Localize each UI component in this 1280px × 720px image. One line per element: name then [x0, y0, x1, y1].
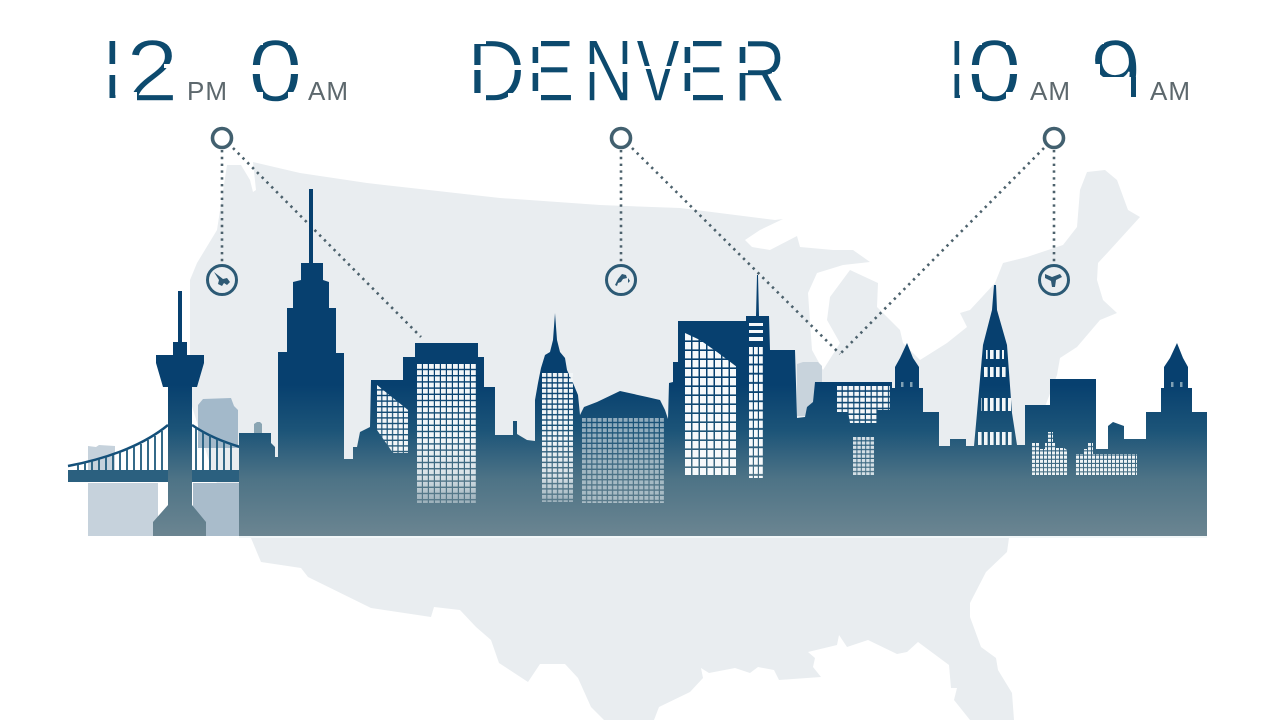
windows: right midrise	[837, 386, 890, 475]
city name: DENVER: E	[678, 21, 727, 120]
digits: 10: 0	[967, 21, 1022, 120]
tower: observation tower	[153, 291, 206, 536]
windows: small turret slits	[901, 382, 1182, 387]
windows: spire building	[542, 373, 573, 502]
marker: mountain ring	[612, 128, 630, 148]
icon: west clock badge	[208, 266, 236, 294]
windows: spire tower bands	[978, 350, 1014, 445]
dotted connector: mountain	[621, 148, 840, 354]
city name: DENVER	[467, 21, 786, 120]
skyline silhouette	[239, 189, 1207, 536]
background buildings: pale blue	[88, 362, 822, 536]
windows: building A side wing	[377, 385, 408, 453]
windows: domed building	[582, 418, 664, 503]
digits: 10	[925, 21, 1023, 120]
city name: DENVER: D	[467, 21, 526, 120]
digits: 12: 1	[86, 21, 135, 120]
windows: building A	[417, 364, 477, 503]
city name: DENVER: E	[526, 21, 575, 120]
windows: narrow tower	[749, 323, 763, 478]
bridge hangers	[78, 428, 231, 470]
dotted connector: east	[840, 148, 1054, 354]
icon: east clock badge	[1040, 266, 1068, 294]
unit: PM: PM	[187, 76, 228, 106]
time label: 9 AM	[1088, 21, 1191, 120]
digits: 10: 1	[930, 21, 979, 120]
time label: 10 AM	[925, 21, 1071, 120]
marker: east ring	[1044, 128, 1064, 148]
digits: 12: 2	[126, 21, 178, 120]
city name: DENVER: N	[584, 21, 634, 120]
time label: 12 PM	[80, 21, 228, 120]
digit: 0: 0	[248, 21, 303, 120]
city name: DENVER: R	[733, 21, 786, 120]
icon: mountain clock badge	[606, 266, 636, 294]
windows: tall glass building	[685, 333, 737, 475]
digits: 12	[80, 21, 178, 120]
windows: lower right clusters	[1032, 432, 1137, 475]
bridge	[68, 425, 240, 482]
dotted connector: west	[222, 148, 421, 337]
unit: AM: AM	[1150, 76, 1191, 106]
unit: AM: AM	[308, 76, 349, 106]
marker: west ring	[212, 128, 232, 148]
bridge deck	[68, 470, 240, 482]
time label: 0 AM	[246, 21, 349, 120]
decorative lower stem	[1131, 77, 1136, 97]
map: United States silhouette	[190, 162, 1140, 720]
digit: 9: 9	[1090, 21, 1141, 120]
ground line	[239, 536, 1207, 538]
unit: AM: AM	[1030, 76, 1071, 106]
bridge cables	[68, 425, 240, 466]
city name: DENVER: V	[636, 21, 680, 120]
